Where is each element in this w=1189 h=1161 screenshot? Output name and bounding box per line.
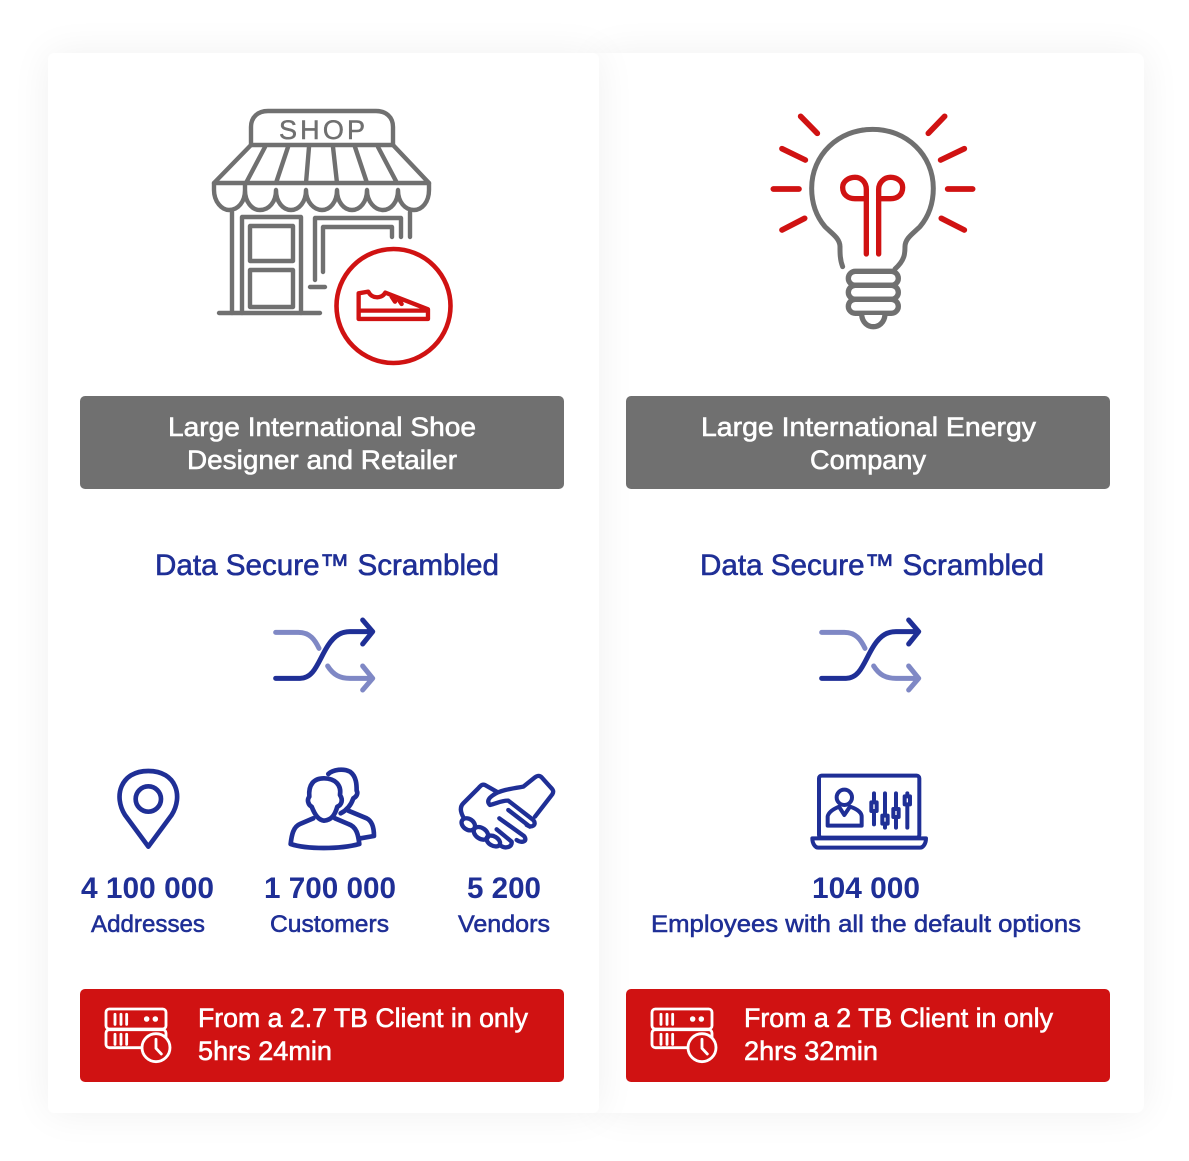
- stat: customers: 1 700 000: [264, 872, 396, 905]
- heading: energy company: Company: [810, 445, 926, 475]
- stat: addresses: 4 100 000: [81, 872, 214, 905]
- callout: 2 TB client: [626, 989, 1110, 1082]
- icon: customers: [291, 770, 374, 848]
- callout: 2 TB client: From a 2 TB Client in only: [744, 1003, 1053, 1033]
- heading: energy company: Large International Energy: [701, 412, 1037, 442]
- callout: 2.7 TB client: 5hrs 24min: [198, 1036, 332, 1066]
- icon: handshake: [459, 776, 553, 849]
- icon: light bulb: [773, 116, 973, 327]
- icon: map pin: [120, 771, 177, 847]
- subheading: data secure scrambled: Data Secure™ Scrambled: [155, 549, 499, 582]
- heading: shoe retailer: [80, 396, 564, 489]
- callout: 2.7 TB client: From a 2.7 TB Client in only: [198, 1003, 528, 1033]
- stat: employees: [651, 872, 1081, 938]
- panel: shoe retailer: [48, 53, 599, 1113]
- subheading: data secure scrambled: Data Secure™ Scrambled: [700, 549, 1044, 582]
- stat: customers: [264, 872, 396, 938]
- stat: addresses: [81, 872, 214, 938]
- icon: server clock: [652, 1009, 716, 1062]
- icon: shuffle arrows: [822, 620, 919, 690]
- stat: vendors: Vendors: [458, 911, 550, 938]
- heading: energy company: [626, 396, 1110, 489]
- callout: 2.7 TB client: [80, 989, 564, 1082]
- stat: vendors: 5 200: [467, 872, 541, 905]
- stat: customers: Customers: [270, 911, 389, 938]
- panel: energy company: [560, 53, 1144, 1113]
- icon: shop with shoe badge: [214, 111, 450, 363]
- heading: shoe retailer: Designer and Retailer: [187, 445, 457, 475]
- stat: addresses: Addresses: [91, 911, 205, 938]
- icon: shop with shoe badge: SHOP: [279, 115, 365, 145]
- stat: vendors: [458, 872, 550, 938]
- icon: server clock: [106, 1009, 170, 1062]
- icon: shuffle arrows: [276, 620, 373, 690]
- icon: laptop with user and sliders: [812, 776, 926, 848]
- callout: 2 TB client: 2hrs 32min: [744, 1036, 878, 1066]
- stat: employees: Employees with all the default options: [651, 911, 1081, 938]
- stat: employees: 104 000: [812, 872, 920, 905]
- heading: shoe retailer: Large International Shoe: [168, 412, 476, 442]
